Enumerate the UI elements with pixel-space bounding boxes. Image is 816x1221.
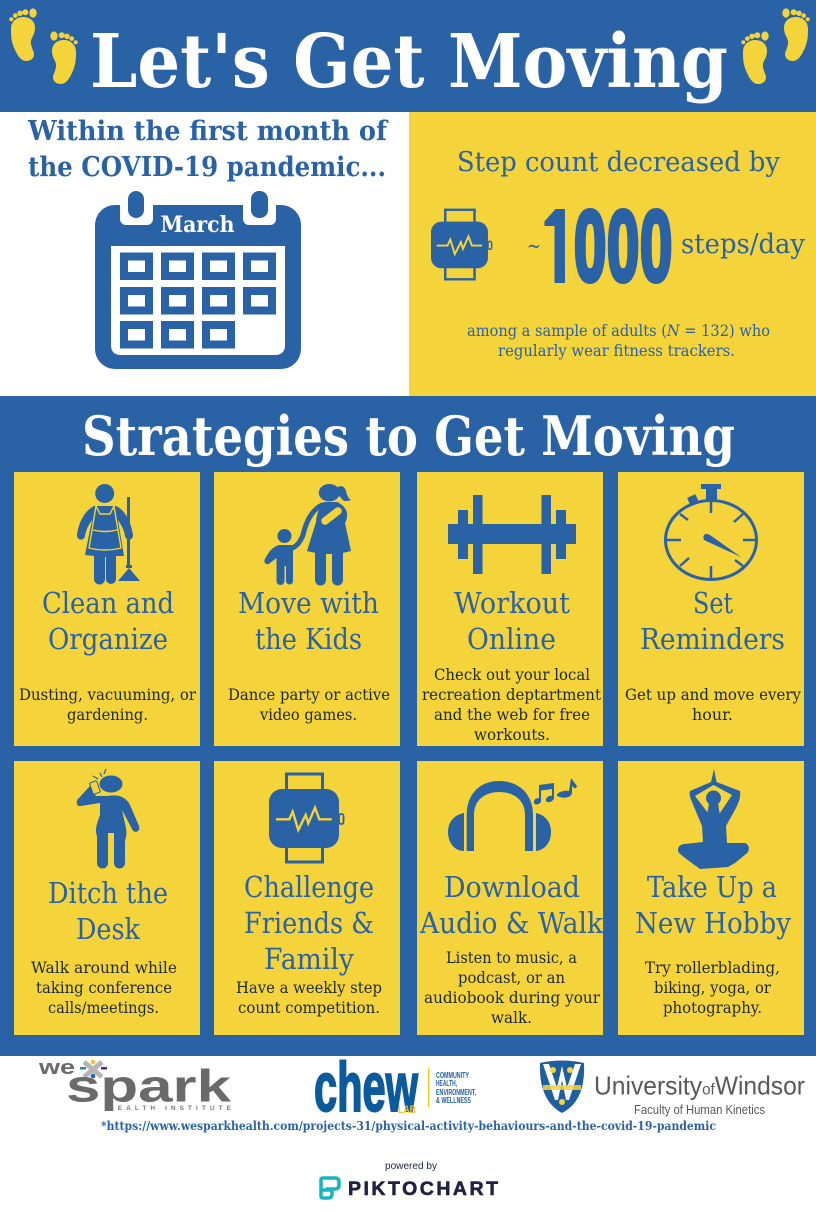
title: Let's Get Moving — [90, 19, 728, 105]
text: sample description: among a sample of adults (N = 132) who — [467, 321, 770, 340]
logo: wespark — [38, 1057, 232, 1112]
title: Challenge — [244, 870, 374, 904]
title — [244, 870, 374, 976]
logo: university of windsor — [540, 1060, 805, 1117]
title: Online — [467, 622, 556, 656]
description — [625, 686, 801, 724]
description — [236, 979, 382, 1017]
description: walk. — [491, 1009, 532, 1027]
description — [19, 686, 197, 724]
panel: step count — [409, 112, 816, 396]
title: New Hobby — [635, 906, 792, 940]
title: Download — [444, 870, 580, 904]
powered by piktochart: powered by — [385, 1161, 437, 1172]
card: move with the kids — [214, 472, 400, 746]
description: Dusting, vacuuming, or — [19, 686, 197, 704]
card: clean and organize — [14, 472, 200, 746]
description: Listen to music, a — [446, 949, 577, 967]
card: take up a new hobby — [618, 761, 804, 1035]
description: and the web for free — [434, 706, 590, 724]
stat: 1000 steps per day: 1000 — [542, 191, 672, 303]
logo: chew lab: ENVIRONMENT, — [436, 1088, 476, 1097]
description: photography. — [663, 999, 762, 1017]
card: download audio and walk — [417, 761, 603, 1035]
stat: 1000 steps per day — [527, 191, 806, 303]
description: Check out your local — [434, 666, 590, 684]
icon: footprints right — [741, 8, 810, 84]
icon: mother with baby and child — [264, 484, 351, 586]
description: biking, yoga, or — [654, 979, 772, 997]
icon: dumbbell — [448, 495, 576, 574]
description: video games. — [259, 706, 357, 724]
description: recreation deptartment — [422, 686, 602, 704]
title — [419, 870, 603, 940]
logo: wespark: spark — [66, 1060, 232, 1112]
description — [424, 949, 601, 1027]
header banner — [0, 0, 816, 112]
icon: calendar — [95, 191, 301, 369]
title: Workout — [454, 586, 570, 620]
title — [635, 870, 792, 940]
title: Organize — [48, 622, 168, 656]
title — [48, 876, 168, 946]
description: gardening. — [67, 706, 148, 724]
description — [422, 666, 602, 744]
heading: within the first month — [27, 116, 389, 183]
heading: within the first month: Within the first month of — [27, 116, 389, 147]
description: Walk around while — [31, 959, 177, 977]
card: ditch the desk — [14, 761, 200, 1035]
logo: university of windsor: Faculty of Human Kinetics — [634, 1102, 765, 1117]
description: Get up and move every — [625, 686, 801, 704]
description: workouts. — [474, 726, 550, 744]
logo: wespark: HEALTH INSTITUTE — [109, 1105, 232, 1112]
description: hour. — [692, 706, 733, 724]
description — [645, 959, 780, 1017]
card: workout online — [417, 472, 603, 746]
description: Have a weekly step — [236, 979, 382, 997]
description: calls/meetings. — [48, 999, 159, 1017]
logo: chew lab: HEALTH, — [436, 1079, 457, 1088]
title — [454, 586, 570, 656]
icon: fitness watch — [431, 210, 492, 279]
powered by piktochart — [321, 1161, 498, 1200]
title: Friends & — [244, 906, 374, 940]
description: taking conference — [36, 979, 172, 997]
logo: university of windsor: UniversityofWindsor — [594, 1070, 805, 1100]
title — [640, 586, 785, 656]
text: sample description — [467, 321, 770, 360]
description — [31, 959, 177, 1017]
icon: yoga pose — [678, 769, 749, 869]
panel: pandemic timing — [0, 112, 409, 396]
title: Take Up a — [647, 870, 777, 904]
description: Dance party or active — [228, 686, 390, 704]
title: Move with — [238, 586, 379, 620]
panel: strategies — [0, 396, 816, 1056]
title — [238, 586, 379, 656]
heading: step count decreased: Step count decreased by — [457, 147, 781, 178]
description: count competition. — [238, 999, 380, 1017]
logo: chew lab: LAB — [398, 1104, 416, 1116]
card: set reminders — [618, 472, 804, 746]
icon: person on phone — [77, 769, 139, 868]
source link: *https://www.wesparkhealth.com/projects-31/physical-activity-behaviours-and-the-covid-19-pandemic — [101, 1119, 716, 1133]
icon: calendar: March — [160, 212, 234, 238]
stat: 1000 steps per day: steps/day — [681, 229, 806, 260]
icon: headphones and music notes — [448, 778, 577, 851]
icon: stopwatch — [666, 484, 756, 580]
stat: 1000 steps per day: ~ — [527, 234, 541, 258]
powered by piktochart: PIKTOCHART — [348, 1178, 498, 1200]
title: Ditch the — [48, 876, 168, 910]
logo: wespark: we — [38, 1057, 75, 1079]
icon: footprints left — [9, 8, 78, 84]
description: audiobook during your — [424, 989, 601, 1007]
title: the Kids — [255, 622, 362, 656]
description: podcast, or an — [458, 969, 565, 987]
title: Family — [264, 942, 355, 976]
title: Reminders — [640, 622, 785, 656]
logo: chew lab: COMMUNITY — [436, 1071, 469, 1080]
title: Set — [693, 586, 733, 620]
title: Audio & Walk — [419, 906, 603, 940]
card: challenge friends and family — [214, 761, 400, 1035]
description: Try rollerblading, — [645, 959, 780, 977]
text: sample description: regularly wear fitness trackers. — [498, 341, 735, 360]
title: Clean and — [42, 586, 174, 620]
description — [228, 686, 390, 724]
logo: chew lab: chew — [314, 1048, 418, 1126]
icon: cleaner with broom — [77, 484, 140, 584]
heading: within the first month: the COVID-19 pandemic... — [28, 152, 386, 183]
logo: chew lab: & WELLNESS — [436, 1096, 471, 1105]
title — [42, 586, 174, 656]
icon: fitness watch — [269, 774, 344, 862]
title: Desk — [76, 912, 140, 946]
